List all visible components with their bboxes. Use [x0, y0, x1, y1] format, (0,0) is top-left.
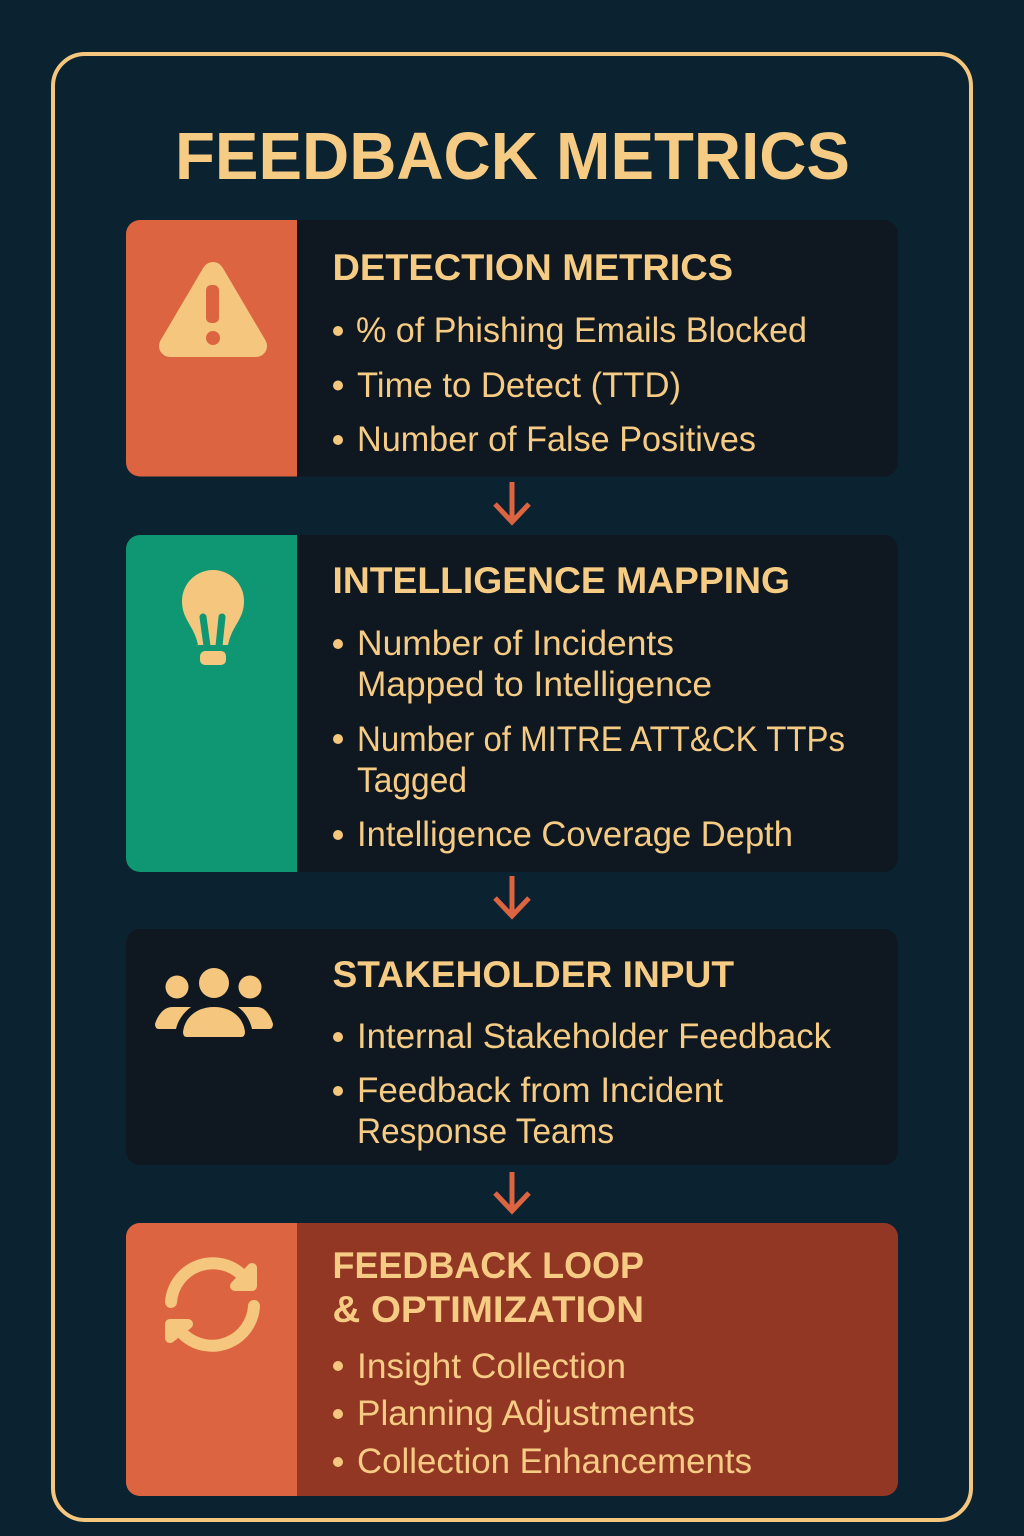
panel: feedback loop and optimization	[126, 1223, 898, 1496]
icon: people group	[155, 968, 273, 1037]
heading: stakeholder input: STAKEHOLDER INPUT	[332, 954, 734, 995]
list: intelligence mapping: Intelligence Coverage Depth	[357, 815, 793, 854]
panel: stakeholder input	[126, 929, 898, 1165]
panel: detection metrics	[126, 220, 898, 476]
list: intelligence mapping	[333, 624, 845, 854]
arrow: detection to intelligence	[495, 482, 529, 522]
icon: light bulb	[182, 570, 244, 665]
heading: feedback loop and optimization	[332, 1245, 644, 1330]
panel: intelligence mapping	[126, 535, 898, 872]
arrow: intelligence to stakeholder	[495, 876, 529, 916]
heading: feedback loop and optimization: FEEDBACK LOOP	[332, 1245, 644, 1286]
list: intelligence mapping: Tagged	[357, 761, 467, 800]
list: intelligence mapping: Number of MITRE ATT&CK TTPs	[357, 720, 845, 759]
heading: feedback loop and optimization: & OPTIMIZATION	[332, 1289, 644, 1330]
list: stakeholder input: Internal Stakeholder Feedback	[357, 1017, 831, 1056]
list: feedback loop and optimization: Insight Collection	[357, 1347, 626, 1386]
list: detection metrics	[333, 311, 807, 459]
list: stakeholder input	[333, 1017, 831, 1151]
list: feedback loop and optimization: Planning Adjustments	[357, 1394, 695, 1433]
list: detection metrics: Time to Detect (TTD)	[357, 366, 681, 405]
heading: intelligence mapping: INTELLIGENCE MAPPING	[332, 560, 790, 601]
list: feedback loop and optimization	[333, 1347, 752, 1481]
title: FEEDBACK METRICS	[175, 119, 850, 194]
list: feedback loop and optimization: Collection Enhancements	[357, 1442, 752, 1481]
heading: detection metrics: DETECTION METRICS	[332, 247, 733, 288]
icon: refresh loop	[170, 1263, 254, 1346]
list: detection metrics: % of Phishing Emails Blocked	[356, 311, 807, 350]
list: intelligence mapping: Number of Incidents	[357, 624, 674, 663]
icon: warning triangle	[170, 273, 256, 346]
list: intelligence mapping: Mapped to Intelligence	[357, 665, 712, 704]
arrow: stakeholder to feedback loop	[495, 1172, 529, 1211]
list: detection metrics: Number of False Positives	[357, 420, 756, 459]
list: stakeholder input: Feedback from Incident	[357, 1071, 723, 1110]
list: stakeholder input: Response Teams	[357, 1112, 614, 1151]
